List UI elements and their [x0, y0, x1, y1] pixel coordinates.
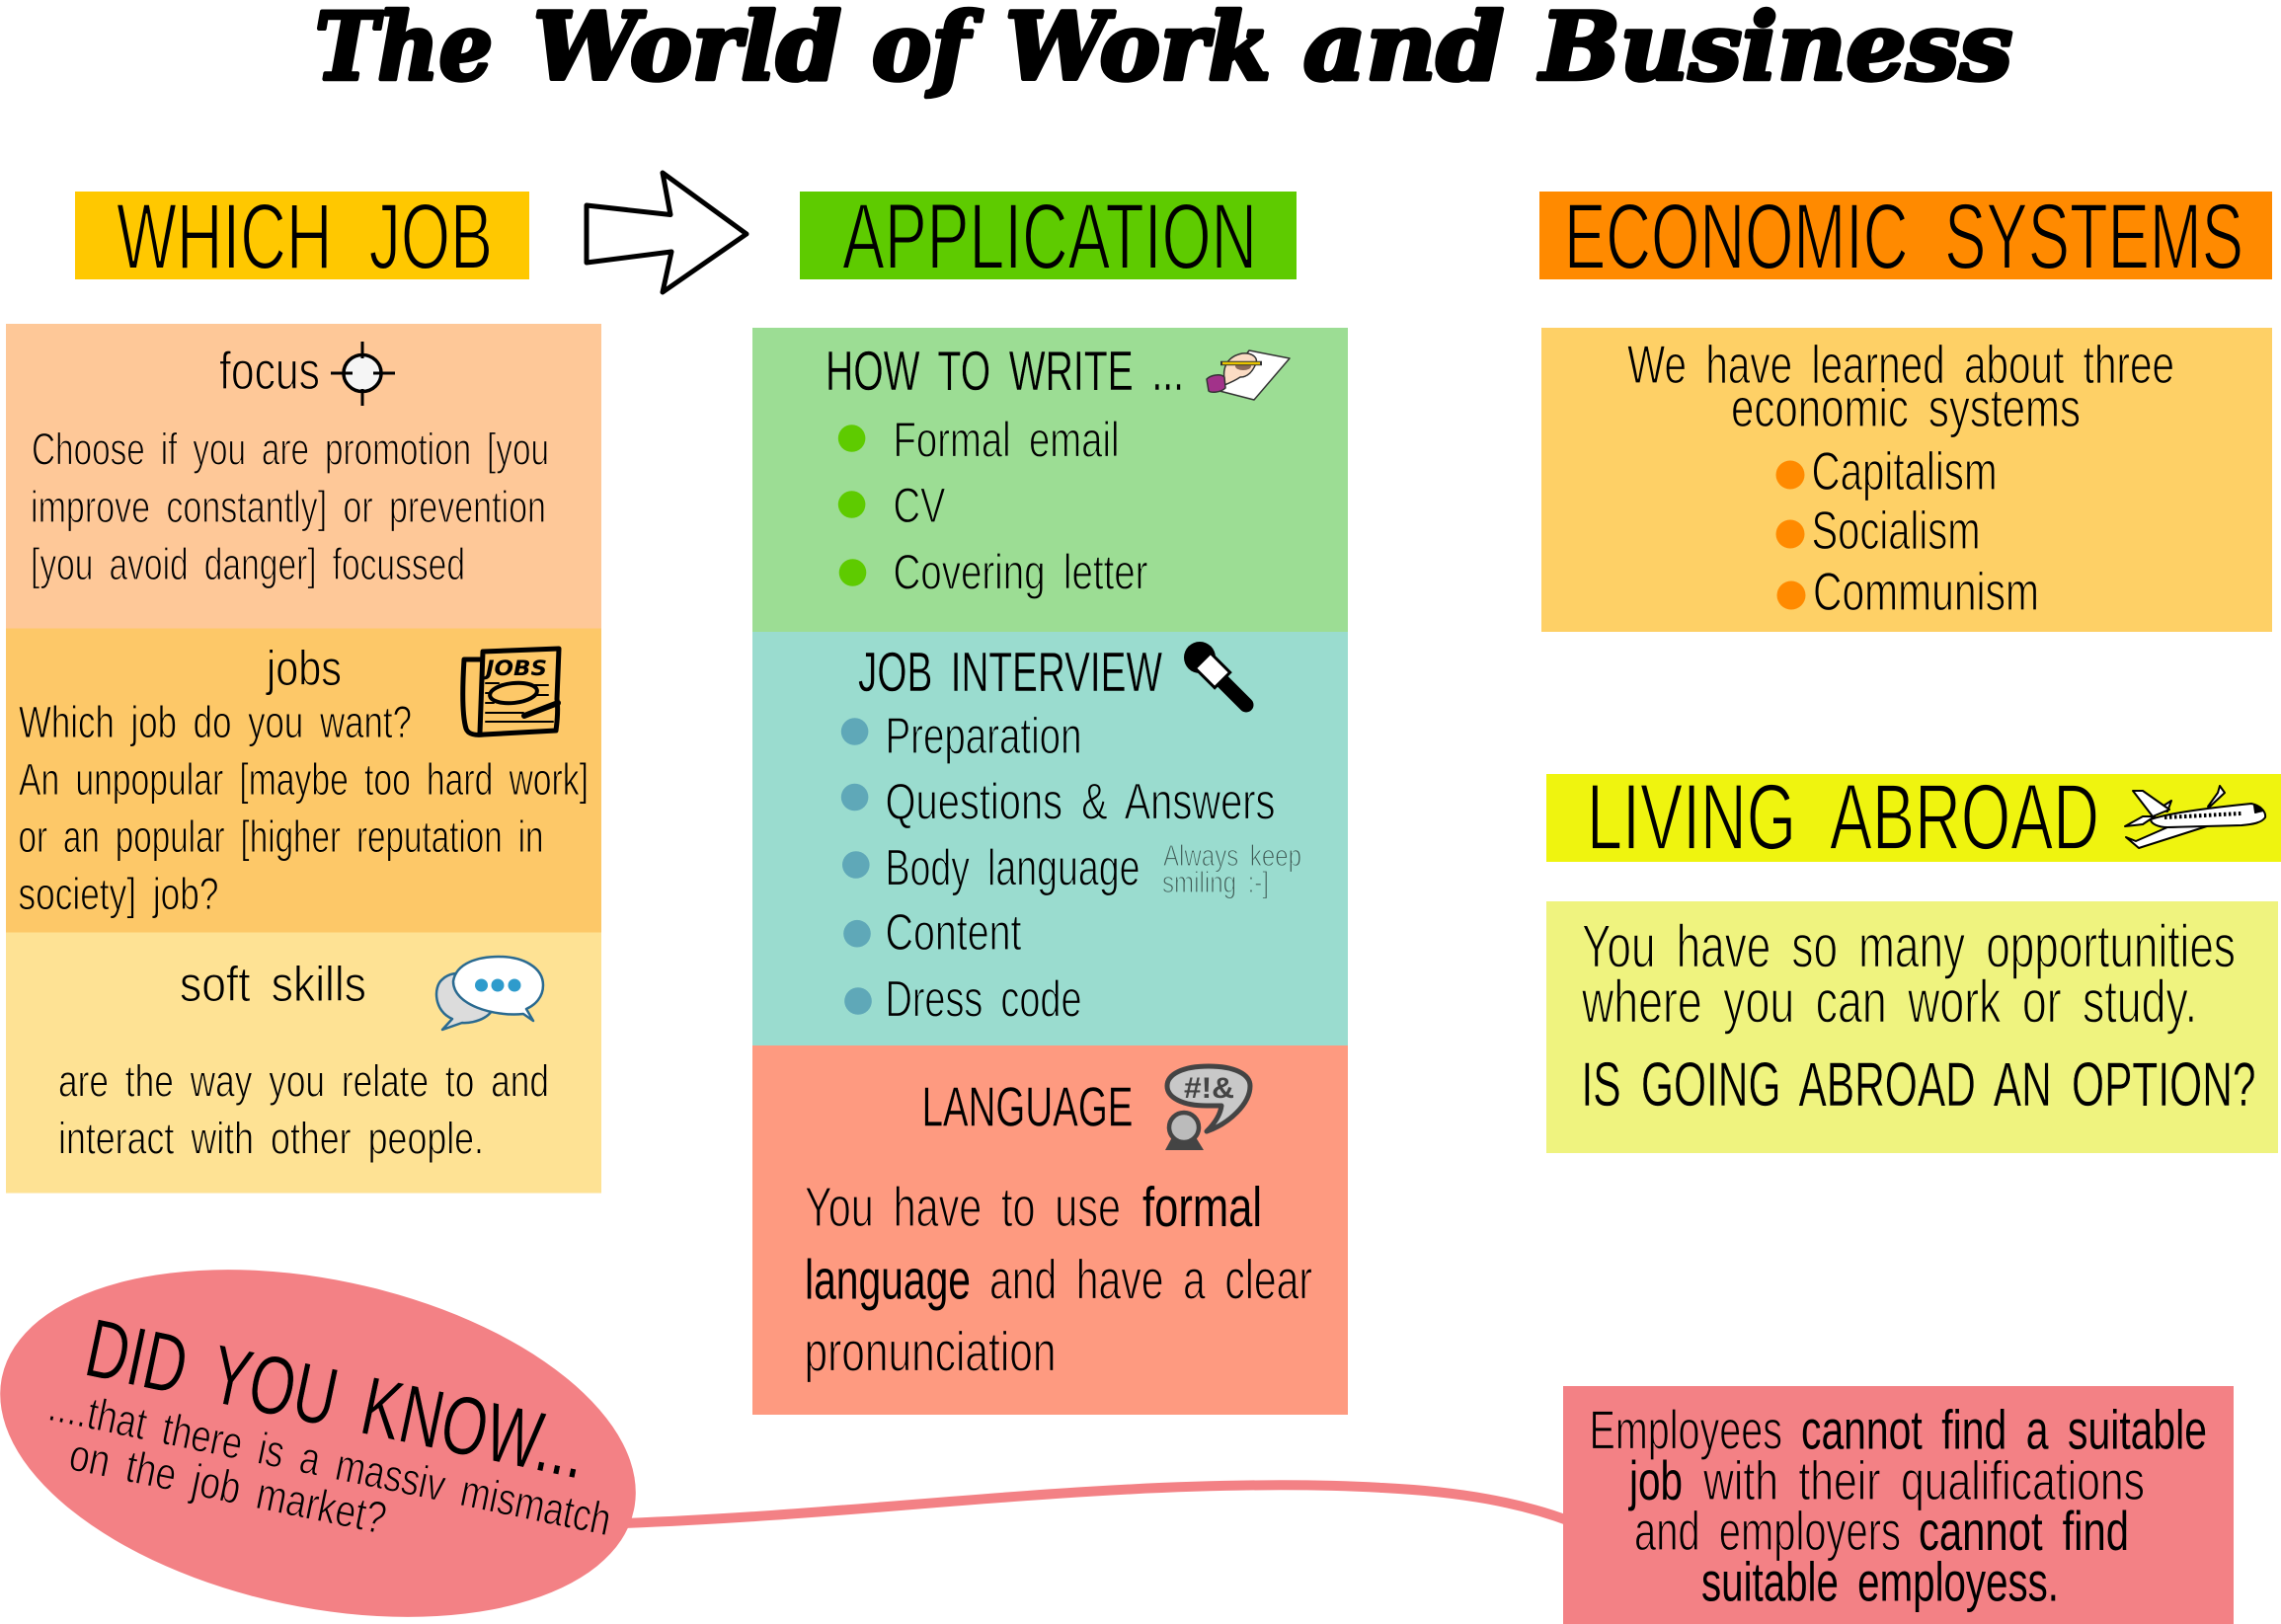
language text: You have to use [805, 1176, 1121, 1239]
heading: application [800, 185, 1297, 289]
panel: language [752, 1045, 1348, 1415]
panel: how to write [752, 328, 1348, 632]
did you know text: ....that there is a massiv mismatch [44, 1379, 615, 1545]
list: job interview: Dress code [885, 971, 1082, 1029]
icon: newspaper: JOBS [482, 657, 547, 680]
icon: speech bubbles [436, 957, 543, 1030]
list: economic systems: Communism [1813, 561, 2039, 622]
list: how to write [838, 413, 1147, 600]
language text [804, 1176, 1312, 1384]
list: job interview: Questions & Answers [885, 774, 1276, 831]
soft skills text [58, 1056, 549, 1163]
panel: jobs [6, 628, 601, 932]
connector line [622, 1485, 1570, 1523]
language heading: LANGUAGE [922, 1076, 1134, 1139]
list: job interview: Content [885, 904, 1022, 962]
did you know heading: DID YOU KNOW... [78, 1301, 595, 1497]
icon: microphone [1184, 642, 1246, 705]
list: job interview: Preparation [885, 708, 1082, 765]
focus text [31, 425, 549, 589]
list: economic systems [1775, 440, 2039, 622]
focus text: [you avoid danger] focussed [31, 539, 465, 589]
list: economic systems: Capitalism [1811, 440, 1997, 502]
callout: employees and employers: Employees [1590, 1398, 1782, 1461]
list: job interview: Body language [885, 839, 1140, 896]
note: always keep smiling [1162, 838, 1301, 899]
icon: speech with symbols: #!& [1184, 1072, 1234, 1105]
focus text: improve constantly] or prevention [31, 482, 546, 532]
heading: which job: WHICH JOB [117, 185, 493, 289]
jobs text: or an popular [higher reputation in [18, 812, 543, 862]
jobs text: Which job do you want? [19, 697, 412, 747]
jobs heading: jobs [265, 641, 342, 696]
focus text: Choose if you are promotion [you [32, 425, 549, 474]
list: economic systems: Socialism [1811, 500, 1981, 561]
callout: did you know [0, 1216, 668, 1624]
did you know text: on the job market? [65, 1429, 391, 1544]
arrow [587, 173, 747, 292]
callout: employees and employers [1563, 1386, 2234, 1624]
panel: economic systems [1541, 328, 2272, 632]
language text: formal [1142, 1176, 1262, 1239]
language text: and have a clear [989, 1248, 1312, 1311]
how to write heading: HOW TO WRITE ... [826, 340, 1184, 403]
icon: airplane [2125, 786, 2265, 848]
did you know text [44, 1379, 615, 1545]
note: always keep smiling: smiling :-] [1162, 865, 1269, 899]
economic systems intro [1627, 334, 2174, 438]
list: how to write: CV [893, 478, 946, 533]
icon: speech with symbols [1165, 1066, 1250, 1150]
panel: focus [6, 324, 601, 629]
jobs text: society] job? [18, 869, 219, 919]
focus heading: focus [219, 342, 320, 401]
living abroad text [1581, 912, 2236, 1035]
callout: employees and employers: and employers [1634, 1500, 1901, 1562]
callout: employees and employers: cannot find [1919, 1500, 2129, 1562]
icon: crosshair target [331, 342, 395, 406]
title [315, 0, 2012, 102]
job interview heading: JOB INTERVIEW [858, 641, 1162, 704]
soft skills text: are the way you relate to and [58, 1056, 549, 1106]
soft skills text: interact with other people. [58, 1114, 484, 1163]
list: how to write: Formal email [893, 413, 1120, 468]
heading: which job [75, 185, 529, 289]
icon: newspaper [463, 649, 559, 735]
panel: job interview [752, 632, 1348, 1045]
jobs text: An unpopular [maybe too hard work] [19, 754, 589, 805]
panel: living abroad [1546, 901, 2278, 1153]
panel: soft skills [6, 932, 601, 1193]
callout: employees and employers: suitable employess. [1701, 1550, 2059, 1613]
soft skills heading: soft skills [180, 957, 366, 1012]
jobs text [18, 697, 589, 919]
economic systems intro: economic systems [1731, 377, 2081, 438]
list: job interview [841, 708, 1276, 1029]
language text: language [805, 1248, 971, 1311]
language text: pronunciation [804, 1321, 1057, 1384]
icon: hand writing on paper [1207, 350, 1290, 400]
list: how to write: Covering letter [893, 545, 1147, 600]
callout: employees and employers: with their qualifications [1702, 1449, 2145, 1511]
callout: employees and employers: job [1628, 1449, 1683, 1511]
note: always keep smiling: Always keep [1163, 838, 1301, 873]
heading: application: APPLICATION [842, 185, 1257, 289]
